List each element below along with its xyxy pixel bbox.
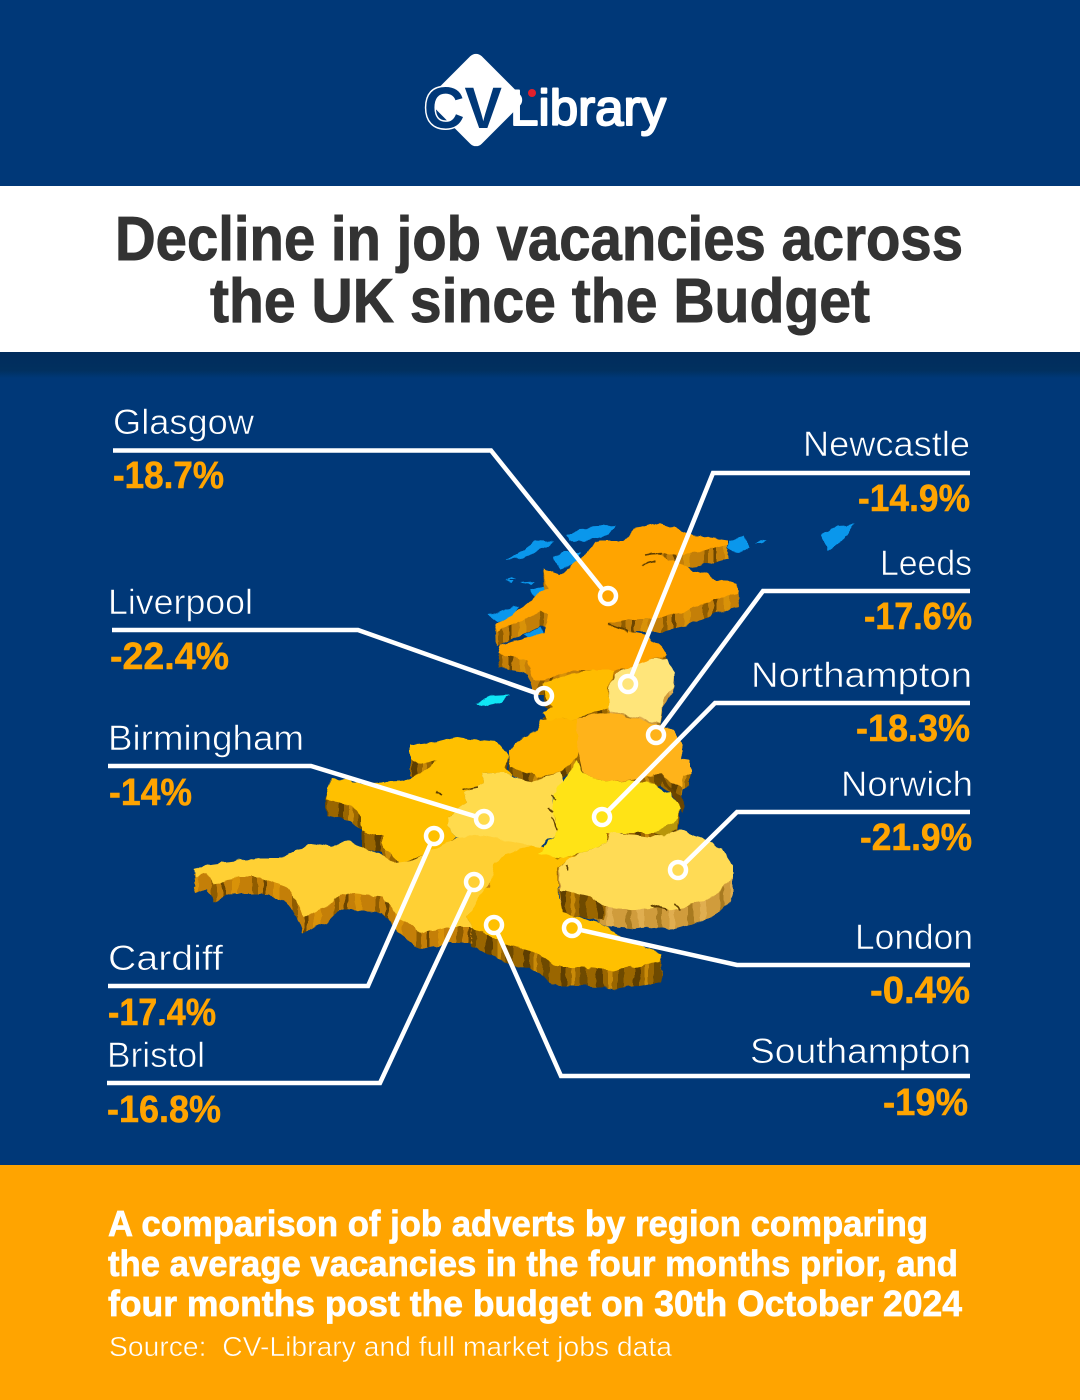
region: Birmingham bbox=[447, 772, 563, 847]
footer description bbox=[108, 1203, 962, 1324]
title: Decline in job vacancies across bbox=[115, 205, 963, 274]
region: Scotland bbox=[495, 523, 738, 680]
logo: CV-Library: Library bbox=[510, 80, 666, 136]
logo: CV-Library: CV bbox=[424, 76, 502, 141]
islands bbox=[475, 524, 855, 706]
callout: Bristol: -16.8% bbox=[107, 1089, 221, 1131]
band shadow bbox=[0, 352, 1080, 378]
map: UK regions bbox=[193, 523, 738, 989]
region: Liverpool bbox=[542, 670, 617, 720]
callout: Liverpool: Liverpool bbox=[108, 583, 253, 622]
callout: Northampton: Northampton bbox=[751, 656, 972, 695]
callout: London: London bbox=[855, 918, 973, 957]
callout: Newcastle: -14.9% bbox=[858, 478, 970, 520]
sides of land bbox=[193, 526, 738, 989]
callout: Birmingham bbox=[108, 719, 492, 827]
callout: Bristol: Bristol bbox=[107, 1036, 205, 1075]
region: Bristol bbox=[193, 832, 535, 933]
callout: Northampton bbox=[594, 656, 972, 825]
callout: Leeds: -17.6% bbox=[864, 596, 972, 638]
region: Leeds bbox=[577, 713, 690, 787]
region: north west lower bbox=[508, 718, 585, 777]
callout: Birmingham: -14% bbox=[109, 772, 192, 814]
coast details bbox=[437, 553, 683, 910]
callout: Newcastle bbox=[620, 425, 970, 692]
region: Newcastle bbox=[608, 658, 674, 723]
logo: CV-Library bbox=[424, 51, 666, 149]
footer description: the average vacancies in the four months prior, and bbox=[108, 1243, 958, 1284]
callout: Southampton: Southampton bbox=[750, 1032, 971, 1071]
callout: Glasgow: -18.7% bbox=[113, 455, 224, 497]
callout: Southampton bbox=[486, 917, 971, 1124]
callout: Birmingham: Birmingham bbox=[108, 719, 304, 758]
callout: Norwich: -21.9% bbox=[860, 817, 972, 859]
callout: Liverpool: -22.4% bbox=[110, 636, 229, 678]
callout: Leeds bbox=[648, 544, 972, 743]
region: Norwich bbox=[558, 830, 733, 910]
title band bbox=[0, 186, 1080, 352]
callout: Leeds: Leeds bbox=[880, 544, 972, 583]
callout: Glasgow: Glasgow bbox=[113, 403, 255, 442]
title bbox=[115, 205, 963, 336]
region: Cardiff bbox=[326, 737, 513, 863]
source line: Source: CV-Library and full market jobs data bbox=[109, 1331, 672, 1362]
region: London and Southampton bbox=[467, 845, 662, 970]
region: Northampton bbox=[538, 760, 680, 858]
panel: footer bbox=[0, 1165, 1080, 1400]
callout: Cardiff: Cardiff bbox=[108, 939, 223, 978]
callout: London bbox=[564, 918, 973, 1012]
callout: Bristol bbox=[107, 874, 482, 1131]
callout: London: -0.4% bbox=[870, 970, 970, 1012]
callout: Cardiff bbox=[108, 828, 442, 1034]
callout: Norwich bbox=[670, 765, 973, 878]
callout: Southampton: -19% bbox=[883, 1082, 968, 1124]
callout: Northampton: -18.3% bbox=[856, 708, 970, 750]
callout: Norwich: Norwich bbox=[841, 765, 973, 804]
island: Isle of Man bbox=[475, 695, 510, 706]
title: the UK since the Budget bbox=[210, 267, 870, 336]
footer description: four months post the budget on 30th October 2024 bbox=[108, 1283, 962, 1324]
footer description: A comparison of job adverts by region comparing bbox=[108, 1203, 928, 1244]
callout: Glasgow bbox=[113, 403, 616, 604]
callout: Newcastle: Newcastle bbox=[803, 425, 970, 464]
callout: Liverpool bbox=[108, 583, 552, 704]
callout: Cardiff: -17.4% bbox=[108, 992, 216, 1034]
